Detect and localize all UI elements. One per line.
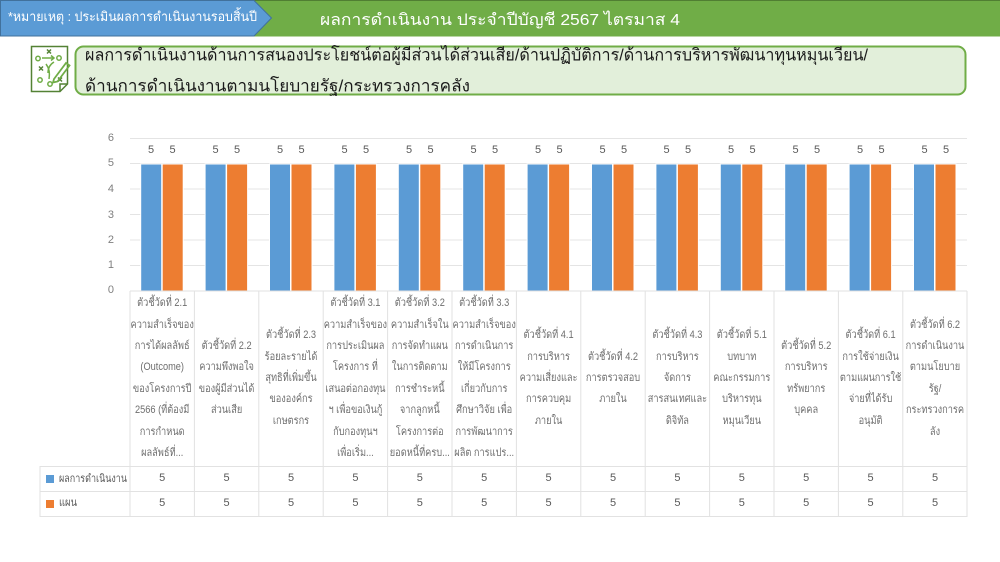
category: 6.2: ลัง	[930, 426, 940, 438]
category: 3.1: เสนอต่อกองทุน	[325, 383, 386, 395]
category: 4.3: ดิจิทัล	[666, 414, 689, 427]
row values: แผน: 5	[739, 497, 745, 509]
category: 3.3: เกี่ยวกับการ	[461, 380, 508, 395]
note banner: *หมายเหตุ : ประเมินผลการดำเนินงานรอบสิ้นปี	[8, 7, 257, 25]
category: 2.3: ตัวชี้วัดที่ 2.3	[266, 326, 316, 341]
bar value labels: 5	[621, 144, 627, 156]
category: 6.2: รัฐ/	[929, 383, 941, 395]
bar value labels: 5	[749, 144, 756, 156]
category: 5.1	[713, 326, 771, 427]
category: 2.1: ของโครงการปี	[133, 381, 191, 395]
bar value labels: 5	[921, 144, 928, 156]
category: 5.2: การบริหาร	[785, 360, 828, 373]
category: 6.2: ตัวชี้วัดที่ 6.2	[910, 316, 960, 331]
category: 3.2: โครงการต่อ	[396, 424, 444, 438]
category: 5.1: ตัวชี้วัดที่ 5.1	[717, 326, 767, 341]
bar value labels: 5	[792, 144, 799, 156]
y axis labels	[108, 132, 114, 296]
bar value labels: 5	[234, 144, 240, 156]
category: 4.3: การบริหาร	[656, 350, 699, 363]
row values: ผลการดำเนินงาน: 5	[932, 472, 938, 484]
category: 3.2: ตัวชี้วัดที่ 3.2	[395, 294, 445, 309]
subtitle line 2: ด้านการดำเนินงานตามนโยบายรัฐ/กระทรวงการคลัง	[85, 76, 470, 96]
category: 6.1: ตามแผนการใช้	[840, 371, 901, 384]
series: แผน bars	[162, 164, 956, 291]
row values: ผลการดำเนินงาน: 5	[674, 472, 680, 484]
series: ผลการดำเนินงาน bars	[141, 164, 934, 291]
category: 3.1: การประเมินผล	[326, 339, 384, 352]
subtitle panel	[76, 44, 966, 96]
category: 4.1	[520, 326, 578, 427]
category: 2.2: ส่วนเสีย	[211, 403, 242, 416]
y axis labels: 1	[108, 259, 114, 271]
row values: ผลการดำเนินงาน: 5	[803, 472, 809, 484]
row values: แผน: 5	[224, 497, 230, 509]
category: 3.3: ความสำเร็จของ	[453, 316, 516, 331]
bar value labels: 5	[470, 144, 477, 156]
category: 2.2: ความพึงพอใจ	[199, 360, 254, 373]
row values: แผน: 5	[868, 497, 874, 509]
bar value labels: 5	[878, 144, 885, 156]
category: 5.1: หมุนเวียน	[723, 414, 761, 427]
category: 3.1: โครงการ ที่	[333, 358, 378, 373]
category: 3.3: ให้มีโครงการ	[458, 359, 511, 373]
category: 6.2: กระทรวงการค	[906, 404, 964, 416]
category: 6.1: การใช้จ่ายเงิน	[842, 350, 899, 363]
category: 2.1	[131, 294, 194, 459]
bar value labels: 5	[212, 144, 219, 156]
category: 3.2: ในการติดตาม	[392, 360, 448, 373]
row values: ผลการดำเนินงาน: 5	[288, 472, 294, 484]
row values: แผน: 5	[288, 497, 294, 509]
bar value labels: 5	[663, 144, 670, 156]
category: 3.1: ฯ เพื่อขอเงินกู้	[328, 401, 382, 416]
y axis labels: 2	[108, 234, 114, 246]
category: 2.1: (Outcome)	[140, 361, 184, 373]
category: 4.1: การบริหาร	[527, 350, 570, 363]
category: 2.3: เกษตรกร	[273, 415, 310, 427]
category: 4.1: การควบคุม	[526, 393, 571, 405]
category: 2.3: สุทธิที่เพิ่มขึ้น	[265, 369, 317, 384]
legend row: ผลการดำเนินงาน: ผลการดำเนินงาน	[59, 473, 127, 485]
category: 4.2: ตัวชี้วัดที่ 4.2	[588, 348, 638, 363]
category: 5.2: ทรัพยากร	[787, 383, 826, 395]
bar value labels: 5	[814, 144, 820, 156]
bar value labels: 5	[148, 144, 154, 156]
bar value labels: 5	[943, 144, 949, 156]
category: 2.2: ของผู้มีส่วนได้	[199, 382, 254, 395]
category: 3.1	[324, 294, 387, 459]
category: 3.3: ศึกษาวิจัย เพื่อ	[456, 401, 512, 416]
category: 2.1: 2566 (ที่ต้องมี	[135, 401, 189, 416]
bar value labels: 5	[363, 144, 369, 156]
category: 5.1: บทบาท	[727, 351, 757, 363]
data table	[40, 291, 967, 517]
category: 4.2	[586, 348, 640, 405]
category: 2.2: ตัวชี้วัดที่ 2.2	[202, 337, 252, 352]
y axis labels: 5	[108, 157, 114, 169]
category: 3.1: ตัวชี้วัดที่ 3.1	[330, 294, 381, 309]
row values: แผน	[159, 497, 938, 509]
category: 3.3: การพัฒนาการ	[456, 426, 513, 438]
header bar	[0, 0, 1000, 36]
category: 2.3: ร้อยละรายได้	[265, 350, 317, 363]
category: 6.2	[906, 316, 964, 438]
category: 3.1: กับกองทุนฯ	[333, 426, 378, 438]
category: 4.3	[648, 326, 707, 427]
category: 3.3: ตัวชี้วัดที่ 3.3	[459, 294, 510, 309]
category: 6.1	[840, 326, 901, 427]
row values: แผน: 5	[481, 497, 487, 509]
bar chart	[108, 132, 967, 296]
bar value labels: 5	[169, 144, 176, 156]
row values: ผลการดำเนินงาน: 5	[868, 472, 874, 484]
legend row: แผน	[46, 497, 77, 509]
row values: ผลการดำเนินงาน: 5	[224, 472, 230, 484]
row values: ผลการดำเนินงาน	[159, 472, 938, 484]
bar value labels: 5	[599, 144, 606, 156]
category: 3.2: จากลูกหนี้	[400, 401, 440, 416]
category: 6.2: ตามนโยบาย	[910, 359, 960, 373]
y axis labels: 6	[108, 132, 114, 144]
subtitle line 1: ผลการดำเนินงานด้านการสนองประโยชน์ต่อผู้มีส่วนได้ส่วนเสีย/ด้านปฏิบัติการ/ด้านการบริหารพัฒนาทุนหมุนเวียน/	[85, 44, 868, 66]
bar value labels: 5	[535, 144, 541, 156]
bar value labels: 5	[427, 144, 434, 156]
category: 5.2	[781, 337, 832, 416]
legend row: แผน: แผน	[59, 497, 77, 509]
category: 2.1: ผลลัพธ์ที่...	[141, 444, 183, 459]
row values: แผน: 5	[610, 497, 616, 509]
category: 6.1: อนุมัติ	[859, 414, 883, 427]
bar value labels: 5	[341, 144, 348, 156]
row values: แผน: 5	[417, 497, 423, 509]
category: 3.2: การจัดทำแผน	[392, 340, 448, 352]
category: 6.1: ตัวชี้วัดที่ 6.1	[846, 326, 896, 341]
category: 6.2: การดำเนินงาน	[906, 339, 964, 352]
y axis labels: 0	[108, 284, 114, 296]
category: 2.3: ขององค์กร	[269, 392, 313, 405]
category: 2.1: การได้ผลลัพธ์	[135, 339, 190, 352]
bar value labels: 5	[728, 144, 734, 156]
category: 3.3: ผลิต การแปร...	[454, 446, 514, 459]
bar value labels: 5	[277, 144, 283, 156]
y axis labels: 4	[108, 183, 114, 195]
icon: strategy plan	[32, 46, 70, 92]
category: 3.1: เพื่อเริ่ม...	[337, 444, 374, 459]
note banner	[0, 0, 272, 36]
row values: ผลการดำเนินงาน: 5	[546, 472, 552, 484]
category: 4.1: ตัวชี้วัดที่ 4.1	[524, 326, 574, 341]
category: 2.1: ตัวชี้วัดที่ 2.1	[137, 294, 188, 309]
row values: แผน: 5	[674, 497, 680, 509]
category: 2.2	[199, 337, 254, 416]
row values: ผลการดำเนินงาน: 5	[417, 472, 423, 484]
category: 4.3: จัดการ	[664, 372, 691, 384]
row values: ผลการดำเนินงาน: 5	[610, 472, 616, 484]
category: 4.2: ภายใน	[599, 392, 627, 405]
category: 3.2: ความสำเร็จใน	[391, 316, 449, 331]
category: 2.1: ความสำเร็จของ	[131, 316, 194, 331]
category: 5.1: บริหารทุน	[722, 392, 762, 405]
row values: ผลการดำเนินงาน: 5	[159, 472, 165, 484]
row values: ผลการดำเนินงาน: 5	[352, 472, 358, 484]
category: 4.3: ตัวชี้วัดที่ 4.3	[652, 326, 703, 341]
bar value labels	[148, 144, 949, 156]
category: 4.3: สารสนเทศและ	[648, 393, 707, 405]
category: 5.1: คณะกรรมการ	[713, 372, 771, 384]
bar value labels: 5	[857, 144, 863, 156]
category: 3.3	[453, 294, 516, 459]
category: 2.1: การกำหนด	[140, 426, 185, 438]
row values: แผน: 5	[546, 497, 552, 509]
row values: ผลการดำเนินงาน: 5	[739, 472, 745, 484]
category: 5.2: ตัวชี้วัดที่ 5.2	[781, 337, 832, 352]
row values: แผน: 5	[352, 497, 358, 509]
row values: แผน: 5	[803, 497, 809, 509]
category: 2.3	[265, 326, 317, 427]
category: 3.3: การดำเนินการ	[455, 339, 514, 352]
table grid	[40, 291, 967, 517]
category: 4.1: ความเสี่ยงและ	[520, 369, 578, 384]
category: 3.2: ยอดหนี้ที่ครบ...	[390, 444, 450, 459]
category: 4.1: ภายใน	[535, 414, 562, 427]
y axis labels: 3	[108, 209, 114, 221]
category: 4.2: การตรวจสอบ	[586, 372, 640, 384]
bar value labels: 5	[556, 144, 563, 156]
bar value labels: 5	[685, 144, 691, 156]
row values: ผลการดำเนินงาน: 5	[481, 472, 487, 484]
row values: แผน: 5	[159, 497, 165, 509]
category: 3.1: ความสำเร็จของ	[324, 316, 387, 331]
row values: แผน: 5	[932, 497, 938, 509]
header title: ผลการดำเนินงาน ประจำปีบัญชี 2567 ไตรมาส 4	[320, 10, 680, 29]
category: 3.2	[390, 294, 450, 459]
bar value labels: 5	[406, 144, 412, 156]
category: 6.1: จ่ายที่ได้รับ	[849, 390, 892, 405]
bar value labels: 5	[298, 144, 305, 156]
category: 3.2: การชำระหนี้	[395, 380, 445, 395]
bar value labels: 5	[492, 144, 498, 156]
category: 5.2: บุคคล	[794, 404, 818, 416]
